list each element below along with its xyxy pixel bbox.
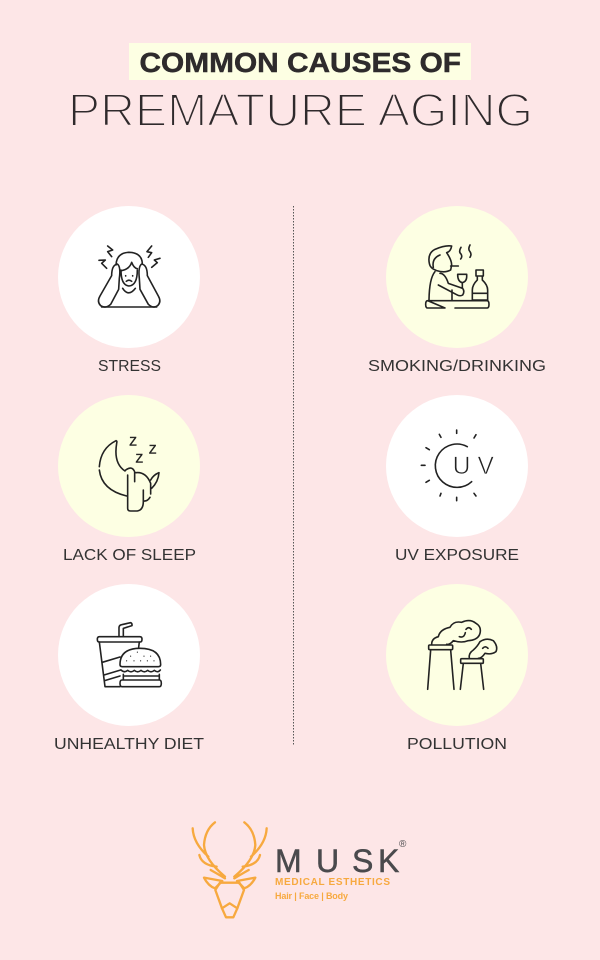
logo (193, 822, 407, 917)
sleep letters: Z (149, 442, 156, 456)
sleep label: LACK OF SLEEP (63, 547, 196, 564)
smoking circle (386, 206, 528, 348)
icon: drink and burger (97, 623, 161, 687)
uv circle (386, 395, 528, 537)
panel: pollution (386, 584, 528, 753)
sun ring and rays (421, 430, 476, 501)
title highlight (129, 43, 471, 80)
pollution circle (386, 584, 528, 726)
moon outline (99, 441, 159, 511)
title (68, 43, 533, 136)
icon: stressed person (98, 246, 160, 307)
diet circle (58, 584, 200, 726)
heading line 1: COMMON CAUSES OF (140, 47, 461, 78)
pollution label: POLLUTION (407, 736, 507, 753)
registered mark: ® (399, 839, 407, 850)
uv label: UV EXPOSURE (395, 547, 519, 564)
panel: unhealthy diet (54, 584, 205, 753)
uv letters: UV (453, 453, 495, 480)
stress label: STRESS (98, 358, 161, 375)
heading line 2: PREMATURE AGING (68, 84, 533, 136)
brand tagline: Hair | Face | Body (275, 891, 348, 901)
icon: sun with UV (421, 430, 495, 501)
panel: stress (58, 206, 200, 375)
icon: person with cigarette and bottle (426, 245, 489, 308)
icon: smoking chimneys (428, 621, 497, 689)
icon: deer head (193, 822, 267, 917)
icon: moon and nightcap (99, 434, 159, 511)
sleep circle (58, 395, 200, 537)
sleep letters: Z (129, 434, 137, 448)
brand name: MUSK (275, 843, 399, 879)
smoking label: SMOKING/DRINKING (368, 358, 546, 375)
panel: smoking and drinking (368, 206, 546, 375)
panel: uv exposure (386, 395, 528, 564)
sleep letters (129, 434, 156, 466)
brand subtitle: MEDICAL ESTHETICS (275, 877, 390, 888)
diet label: UNHEALTHY DIET (54, 736, 205, 753)
sleep letters: Z (136, 452, 143, 466)
panel: lack of sleep (58, 395, 200, 564)
stress circle (58, 206, 200, 348)
